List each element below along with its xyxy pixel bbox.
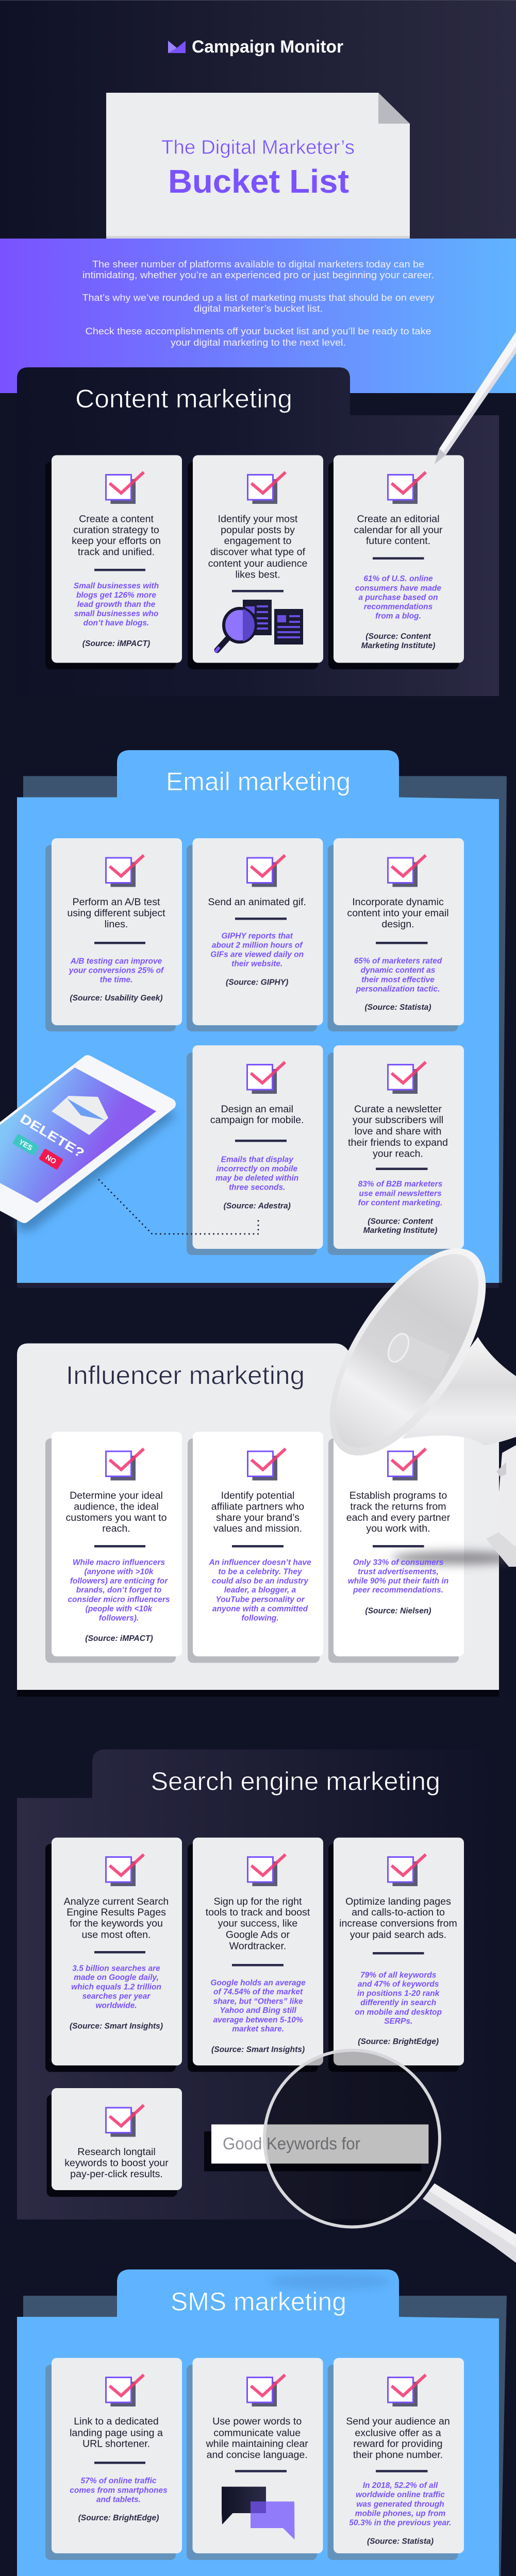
card: popular posts: content your audience: [208, 558, 308, 569]
card: mobile campaign: may be deleted within: [215, 1174, 298, 1183]
card: exclusive offer: was generated through: [356, 2500, 444, 2509]
card: landing pages: and calls-to-action to: [352, 1907, 445, 1918]
card: URL shortener: comes from smartphones: [70, 2486, 168, 2495]
card: A/B test: Perform an A/B test: [73, 896, 160, 908]
card: exclusive offer: Send your audience an: [346, 2416, 450, 2427]
card: newsletter: Curate a newsletter: [354, 1104, 442, 1115]
card: affiliate partners: An influencer doesn’t have: [208, 1558, 311, 1567]
card: A/B test: using different subject: [67, 908, 165, 919]
card: ideal audience: followers).: [99, 1614, 139, 1622]
icon: envelope: [52, 1096, 108, 1135]
card: landing pages: Optimize landing pages: [345, 1896, 451, 1907]
card: ideal audience: audience, the ideal: [74, 1501, 159, 1513]
card: animated gif: their website.: [231, 959, 282, 969]
card: analyze SERPs: which equals 1.2 trillion: [71, 1982, 161, 1991]
card: affiliate partners: anyone with a committed: [212, 1604, 308, 1614]
card: URL shortener: and tablets.: [96, 2496, 141, 2504]
card: newsletter: [328, 1045, 464, 1255]
card: A/B test: the time.: [100, 976, 132, 984]
card: dynamic content: dynamic content as: [361, 966, 436, 975]
card: popular posts: likes best.: [235, 569, 280, 580]
magnifying glass illustration: [264, 2050, 516, 2263]
card: ideal audience: While macro influencers: [73, 1558, 165, 1567]
card: ideal audience: reach.: [102, 1523, 130, 1534]
card: popular posts: engagement to: [224, 535, 291, 547]
card: analyze SERPs: [45, 1838, 182, 2072]
card: analyze SERPs: Engine Results Pages: [66, 1907, 166, 1918]
card: URL shortener: landing page using a: [70, 2427, 163, 2438]
card: A/B test: lines.: [105, 919, 128, 930]
card: ideal audience: (anyone with >10k: [85, 1567, 154, 1577]
card: popular posts: popular posts by: [221, 524, 295, 536]
card: partner programs: track the returns from: [350, 1501, 446, 1513]
card: analyze SERPs: for the keywords you: [70, 1918, 163, 1929]
title paper: The Digital Marketer’s: [161, 137, 355, 159]
card: mobile campaign: campaign for mobile.: [210, 1114, 304, 1126]
card: editorial calendar: consumers have made: [355, 584, 441, 592]
card: search tools: Sign up for the right: [213, 1896, 302, 1907]
heading: search engine marketing: Search engine marketing: [151, 1767, 440, 1796]
card: search tools: share, but “Others” like: [213, 1997, 303, 2006]
card: newsletter: (Source: Content: [368, 1217, 434, 1226]
intro band: digital marketer’s bucket list.: [194, 303, 323, 314]
card: affiliate partners: could also be an industry: [212, 1577, 309, 1585]
card: dynamic content: 65% of marketers rated: [354, 957, 442, 965]
card: analyze SERPs: use most often.: [82, 1929, 151, 1940]
card: A/B test: [45, 838, 182, 1031]
card: newsletter: their friends to expand: [348, 1137, 448, 1148]
card: editorial calendar: from a blog.: [375, 612, 421, 620]
card: partner programs: trust advertisements,: [358, 1567, 439, 1577]
card: analyze SERPs: worldwide.: [95, 2001, 137, 2010]
card: editorial calendar: [328, 455, 464, 669]
card: analyze SERPs: made on Google daily,: [74, 1973, 159, 1982]
card: landing pages: 79% of all keywords: [360, 1971, 437, 1979]
card: content curation: lead growth than the: [77, 600, 156, 609]
card: editorial calendar: a purchase based on: [358, 594, 438, 602]
card: editorial calendar: Create an editorial: [357, 513, 440, 524]
card: dynamic content: personalization tactic.: [356, 985, 440, 993]
card: analyze SERPs: searches per year: [82, 1992, 151, 2001]
card: content curation: [45, 455, 182, 669]
card: ideal audience: brands, don’t forget to: [76, 1586, 161, 1595]
card: landing pages: differently in search: [360, 1998, 436, 2007]
card: popular posts: discover what type of: [210, 547, 306, 558]
card: search tools: Google Ads or: [226, 1929, 290, 1940]
card: landing pages: [328, 1838, 464, 2072]
card: exclusive offer: [328, 2358, 464, 2560]
card: mobile campaign: [187, 1045, 323, 1255]
card: mobile campaign: Design an email: [221, 1104, 293, 1115]
card: content curation: don’t have blogs.: [84, 619, 149, 628]
card: newsletter: 83% of B2B marketers: [358, 1180, 443, 1189]
card: content curation: (Source: iMPACT): [82, 639, 150, 648]
card: search tools: market share.: [232, 2025, 284, 2033]
card: ideal audience: [45, 1432, 182, 1663]
card: editorial calendar: Marketing Institute): [361, 641, 435, 650]
card: newsletter: love and share with: [355, 1126, 441, 1137]
card: search tools: (Source: Smart Insights): [211, 2045, 305, 2054]
card: affiliate partners: following.: [241, 1614, 279, 1622]
card: ideal audience: Determine your ideal: [70, 1490, 163, 1501]
card: content curation: Small businesses with: [74, 582, 159, 590]
card: editorial calendar: calendar for all your: [354, 524, 443, 536]
card: content curation: blogs get 126% more: [76, 591, 156, 600]
heading: email marketing: Email marketing: [166, 767, 351, 796]
card: landing pages: increase conversions from: [339, 1918, 457, 1929]
card: affiliate partners: leader, a blogger, a: [224, 1586, 296, 1595]
icon: speech bubbles: [222, 2487, 295, 2539]
card: analyze SERPs: 3.5 billion searches are: [72, 1964, 160, 1973]
card: ideal audience: (people with <10k: [86, 1604, 153, 1614]
card: A/B test: your conversions 25% of: [69, 967, 164, 975]
panel: content marketing: [17, 367, 499, 696]
heading: SMS marketing: SMS marketing: [171, 2287, 346, 2316]
card: power words: while maintaining clear: [206, 2438, 308, 2449]
card: exclusive offer: (Source: Statista): [367, 2537, 434, 2546]
card: affiliate partners: affiliate partners who: [211, 1501, 304, 1513]
button: no: NO: [44, 1153, 58, 1165]
card: longtail keywords: Research longtail: [77, 2146, 156, 2158]
card: newsletter: for content marketing.: [358, 1198, 442, 1208]
card: popular posts: Identify your most: [218, 513, 298, 524]
card: popular posts: [188, 455, 323, 669]
card: search tools: [188, 1838, 323, 2072]
card: URL shortener: [45, 2358, 182, 2560]
phone illustration: DELETE?: [18, 1111, 87, 1161]
card: longtail keywords: [47, 2088, 182, 2197]
arrow: dotted connector: [99, 1180, 258, 1234]
card: mobile campaign: incorrectly on mobile: [217, 1164, 297, 1174]
card: editorial calendar: recommendations: [364, 602, 433, 611]
card: editorial calendar: future content.: [366, 535, 430, 547]
panel: SMS marketing: [17, 2269, 507, 2576]
card: power words: communicate value: [213, 2427, 301, 2438]
heading: influencer marketing: Influencer marketing: [66, 1361, 305, 1390]
card: landing pages: on mobile and desktop: [355, 2008, 442, 2016]
intro band: intimidating, whether you’re an experienced pro or just beginning your career.: [82, 269, 434, 280]
card: power words: and concise language.: [207, 2449, 308, 2461]
card: analyze SERPs: Analyze current Search: [64, 1896, 169, 1907]
card: dynamic content: [328, 838, 464, 1031]
card: URL shortener: 57% of online traffic: [80, 2477, 157, 2485]
card: A/B test: A/B testing can improve: [70, 957, 162, 965]
card: content curation: small businesses who: [74, 609, 158, 618]
card: URL shortener: URL shortener.: [82, 2438, 150, 2449]
card: exclusive offer: In 2018, 52.2% of all: [363, 2481, 438, 2490]
button: no: [39, 1148, 63, 1170]
card: exclusive offer: worldwide online traffic: [356, 2490, 445, 2499]
logo: Campaign Monitor top: Campaign Monitor: [192, 37, 343, 57]
card: partner programs: while 90% put their faith in: [348, 1577, 448, 1585]
card: affiliate partners: [188, 1432, 323, 1663]
card: partner programs: (Source: Nielsen): [365, 1606, 431, 1616]
card: content curation: track and unified.: [78, 547, 155, 558]
card: power words: Use power words to: [212, 2416, 302, 2427]
title paper: Bucket List: [168, 163, 349, 200]
card: newsletter: your subscribers will: [353, 1114, 443, 1126]
card: content curation: curation strategy to: [73, 524, 159, 536]
intro band: The sheer number of platforms available to digital marketers today can be: [92, 259, 424, 269]
header background: [0, 0, 516, 239]
card: partner programs: [328, 1432, 516, 1663]
card: animated gif: Send an animated gif.: [208, 896, 306, 908]
card: animated gif: [187, 838, 323, 1031]
card: URL shortener: Link to a dedicated: [74, 2416, 159, 2427]
card: partner programs: Only 33% of consumers: [353, 1558, 444, 1567]
card: mobile campaign: Emails that display: [221, 1155, 294, 1164]
card: animated gif: GIFs are viewed daily on: [210, 950, 304, 959]
card: newsletter: use email newsletters: [359, 1189, 442, 1198]
card: URL shortener: (Source: BrightEdge): [78, 2514, 159, 2522]
card: animated gif: about 2 million hours of: [212, 941, 303, 950]
card: newsletter: your reach.: [373, 1148, 423, 1159]
intro band: [0, 239, 516, 393]
intro band: your digital marketing to the next level.: [171, 337, 346, 348]
card: affiliate partners: share your brand’s: [216, 1512, 299, 1523]
card: partner programs: each and every partner: [346, 1512, 451, 1523]
panel: search engine marketing: [17, 1750, 499, 2219]
card: affiliate partners: YouTube personality or: [215, 1595, 305, 1604]
card: power words: [187, 2358, 323, 2560]
card: exclusive offer: 50.3% in the previous year.: [349, 2518, 452, 2528]
card: partner programs: peer recommendations.: [353, 1586, 443, 1595]
card: content curation: Create a content: [79, 513, 154, 524]
heading: content marketing: Content marketing: [75, 384, 292, 413]
card: search tools: Google holds an average: [210, 1978, 306, 1988]
card: search tools: your success, like: [218, 1918, 297, 1929]
card: analyze SERPs: (Source: Smart Insights): [70, 2022, 163, 2030]
card: search tools: tools to track and boost: [206, 1907, 310, 1918]
phone illustration: [0, 1061, 177, 1231]
card: dynamic content: design.: [381, 919, 414, 930]
panel: influencer marketing: [17, 1344, 516, 1697]
card: dynamic content: (Source: Statista): [364, 1003, 431, 1012]
card: ideal audience: (Source: iMPACT): [85, 1634, 153, 1643]
card: affiliate partners: values and mission.: [213, 1523, 302, 1534]
search bar: Good Keywords for: [223, 2134, 360, 2153]
card: newsletter: Marketing Institute): [363, 1226, 437, 1235]
card: animated gif: (Source: GIPHY): [226, 978, 288, 987]
card: editorial calendar: 61% of U.S. online: [363, 574, 433, 583]
card: partner programs: you work with.: [366, 1523, 430, 1534]
card: exclusive offer: their phone number.: [353, 2449, 443, 2461]
card: mobile campaign: (Source: Adestra): [224, 1201, 291, 1211]
intro band: That’s why we’ve rounded up a list of marketing musts that should be on every: [82, 292, 435, 303]
card: landing pages: in positions 1-20 rank: [357, 1989, 440, 1998]
card: landing pages: SERPs.: [384, 2017, 412, 2026]
card: mobile campaign: three seconds.: [229, 1183, 285, 1192]
megaphone illustration: [299, 1224, 516, 1567]
card: exclusive offer: exclusive offer as a: [355, 2427, 441, 2438]
card: landing pages: and 47% of keywords: [358, 1980, 439, 1989]
card: dynamic content: content into your email: [347, 908, 449, 919]
card: ideal audience: consider micro influencers: [68, 1595, 170, 1604]
card: editorial calendar: (Source: Content: [365, 632, 431, 641]
title paper: [106, 93, 410, 239]
card: search tools: Wordtracker.: [229, 1940, 286, 1952]
card: animated gif: GIPHY reports that: [222, 931, 293, 941]
card: longtail keywords: keywords to boost your: [64, 2157, 169, 2168]
icon: magnifier over documents: [216, 600, 303, 651]
card: landing pages: (Source: BrightEdge): [358, 2037, 439, 2046]
button: yes: [12, 1133, 39, 1156]
pencil: top: [435, 332, 516, 464]
card: ideal audience: customers you want to: [65, 1512, 167, 1523]
card: landing pages: your paid search ads.: [350, 1929, 446, 1940]
card: affiliate partners: Identify potential: [221, 1490, 294, 1501]
intro band: Check these accomplishments off your bucket list and you’ll be ready to take: [86, 326, 431, 336]
card: search tools: of 74.54% of the market: [213, 1988, 303, 1996]
card: partner programs: Establish programs to: [349, 1490, 447, 1501]
card: A/B test: (Source: Usability Geek): [70, 994, 163, 1003]
button: yes: YES: [18, 1138, 34, 1152]
card: ideal audience: followers) are enticing for: [70, 1577, 168, 1585]
search bar: [204, 2125, 428, 2171]
card: exclusive offer: mobile phones, up from: [355, 2509, 446, 2518]
card: search tools: average between 5-10%: [213, 2015, 303, 2025]
card: longtail keywords: pay-per-click results.: [70, 2168, 163, 2180]
card: dynamic content: their most effective: [361, 976, 435, 984]
card: exclusive offer: reward for providing: [353, 2438, 443, 2449]
card: dynamic content: Incorporate dynamic: [352, 896, 444, 908]
card: affiliate partners: to be a celebrity. They: [218, 1567, 303, 1577]
card: content curation: keep your efforts on: [72, 535, 161, 547]
card: search tools: Yahoo and Bing still: [220, 2006, 296, 2015]
panel: email marketing: [0, 750, 507, 1288]
